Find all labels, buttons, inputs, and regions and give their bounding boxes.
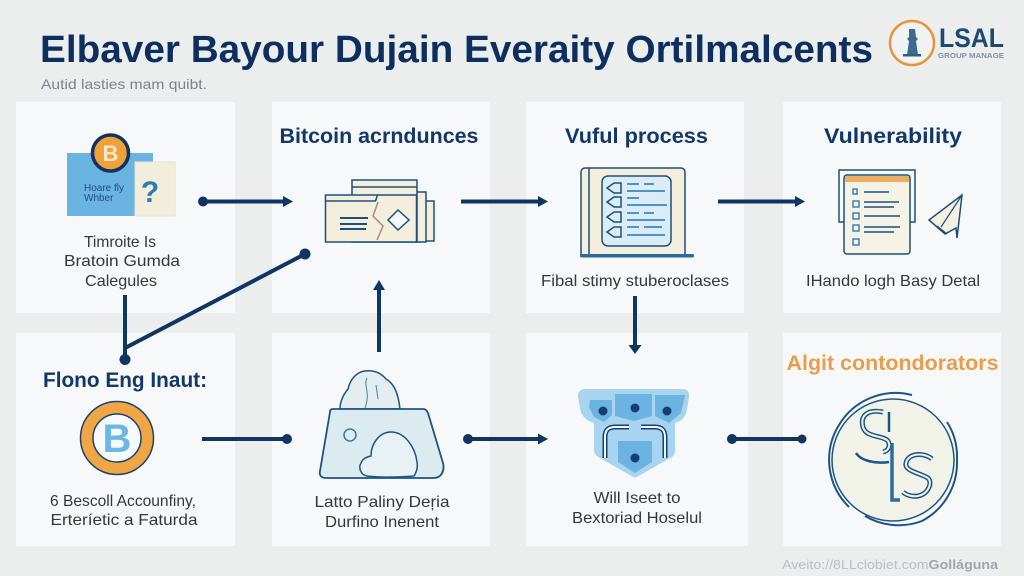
heading: panel 2: Bitcoin acrndunces <box>280 125 478 148</box>
panel: bottom row 2 <box>272 333 490 546</box>
panel: top row 1 <box>16 102 235 313</box>
text: panel 3 caption: Fibal stimy stuberoclases <box>541 273 729 290</box>
arrow: panel 1 to panel 2 <box>198 196 293 207</box>
panel: top row 3 <box>526 102 744 313</box>
icon: bitcoin folder with question mark: Whber <box>84 193 114 204</box>
panel: bottom row 4 <box>783 333 1001 546</box>
text: panel 5 caption <box>50 493 198 529</box>
icon: bitcoin folder with question mark: B <box>103 141 118 166</box>
text: panel 6 caption: Durfino Inenent <box>325 514 440 531</box>
icon: bitcoin coin <box>80 402 154 474</box>
icon: bitcoin coin: B <box>103 417 131 461</box>
logo <box>890 21 1004 65</box>
arrow: panel 5 up to panels 1 and 2 connector <box>120 248 310 365</box>
text: panel 5 caption: 6 Bescoll Accounfiny, <box>50 493 196 510</box>
text: panel 5 caption: Erteríetic a Faturda <box>50 512 198 529</box>
heading: panel 4: Vulnerability <box>824 125 962 148</box>
arrow: panel 6 to panel 7 <box>463 434 548 444</box>
panel: bottom row 1 <box>16 333 235 546</box>
icon: network of shields <box>578 389 689 478</box>
arrow: panel 2 to panel 3 <box>461 196 548 207</box>
arrow: panel 3 down to panel 7 <box>628 296 642 354</box>
icon: dollar coin <box>829 393 957 525</box>
heading: panel 8: Algit contondorators <box>786 352 998 375</box>
icon: checklist with paper plane <box>839 170 962 254</box>
footer attribution: Aveito://8LLclobiet.com Golláguna <box>782 557 999 572</box>
arrow: panel 3 to panel 4 <box>718 196 805 207</box>
text: panel 1 caption: Bratoin Gumda <box>64 253 180 270</box>
arrow: panel 5 to panel 6 <box>202 434 292 444</box>
logo: GROUP MANAGE <box>938 53 1004 60</box>
text: panel 7 caption: Bextoriad Hoselul <box>572 510 702 527</box>
panel: top row 2 <box>272 102 490 313</box>
text: panel 7 caption <box>572 490 702 527</box>
logo: LSAL <box>939 23 1004 53</box>
text: panel 1 caption: Calegules <box>85 273 157 290</box>
text: panel 6 caption <box>314 494 450 531</box>
text: panel 4 caption: IHando logh Basy Detal <box>806 273 980 290</box>
panel: top row 4 <box>783 102 1001 313</box>
title: Elbaver Bayour Dujain Everaity Ortilmalcents <box>40 29 873 71</box>
icon: bitcoin folder with question mark: Hoare fly <box>84 183 124 194</box>
arrow: panel 6 up to panel 2 <box>373 280 385 352</box>
arrow: panel 7 to panel 8 <box>727 434 806 444</box>
text: panel 1 caption: Timroite Is <box>84 234 156 251</box>
icon: bitcoin folder with question mark <box>67 135 175 216</box>
icon: bitcoin folder with question mark: ? <box>141 176 159 209</box>
text: panel 7 caption: Will Iseet to <box>594 490 681 507</box>
subtitle: Autid lasties mam quibt. <box>41 76 207 92</box>
icon: document folders <box>326 180 434 242</box>
panel: bottom row 3 <box>526 333 748 546</box>
text: panel 6 caption: Latto Paliny Deŗia <box>314 494 450 511</box>
icon: rock bag <box>320 371 444 478</box>
text: panel 1 caption <box>64 234 180 290</box>
icon: checklist tablet <box>580 168 694 258</box>
heading: panel 5: Flono Eng Inaut: <box>43 369 207 392</box>
heading: panel 3: Vuful process <box>565 125 708 148</box>
